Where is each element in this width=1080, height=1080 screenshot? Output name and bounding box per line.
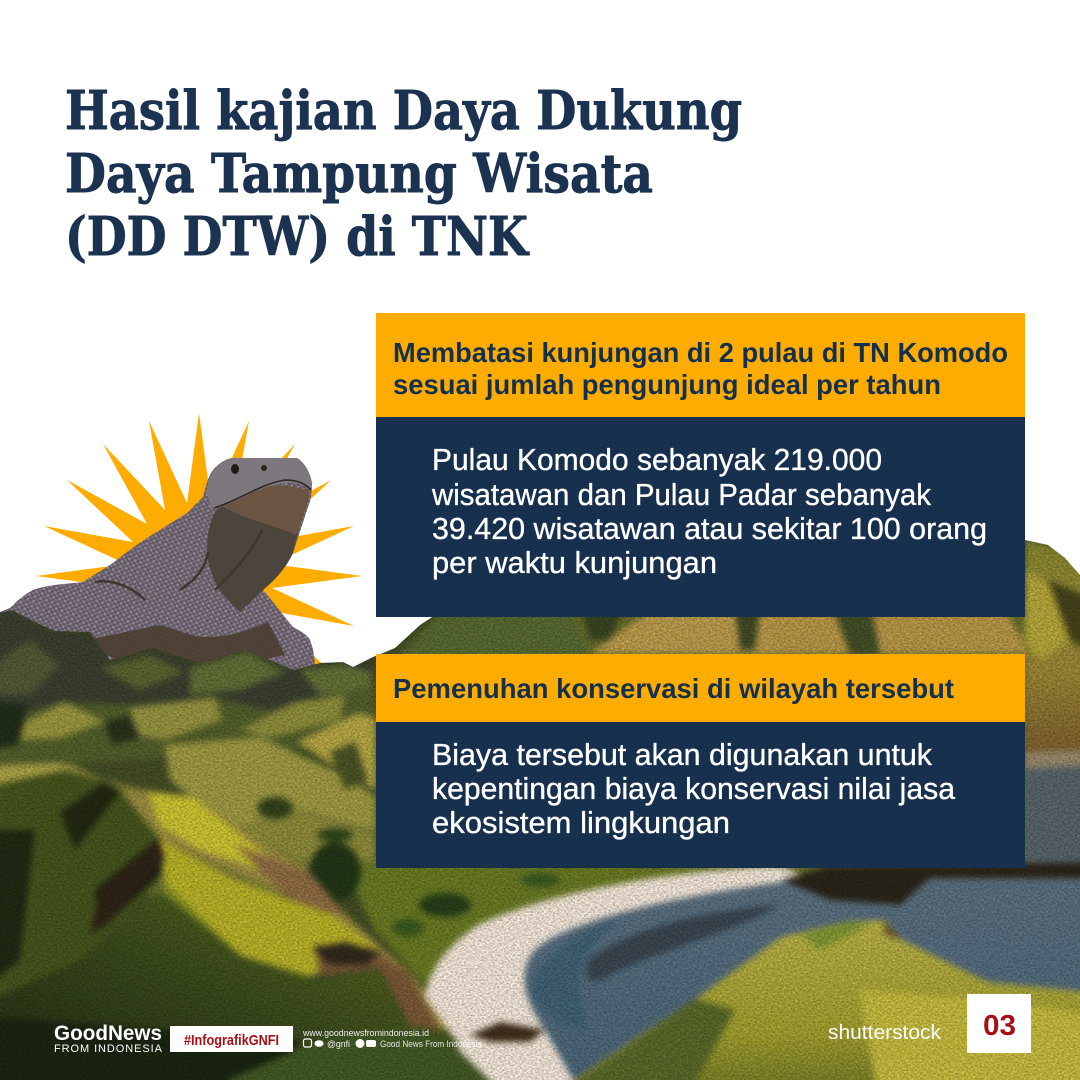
title: Daya Tampung Wisata: [65, 143, 653, 205]
panel body text: 39.420 wisatawan atau sekitar 100 orang: [432, 511, 987, 546]
panel body text: ekosistem lingkungan: [432, 805, 730, 840]
komodo body: [0, 458, 315, 690]
title: (DD DTW) di TNK: [65, 206, 530, 268]
panel body text: wisatawan dan Pulau Padar sebanyak: [431, 477, 931, 512]
footer: social links: [302, 1028, 483, 1050]
icon: twitter: [314, 1040, 324, 1047]
landscape photo: [0, 500, 1080, 1080]
main mountain lower shaded flank: [0, 888, 445, 1046]
panel: conservation: [376, 654, 1025, 868]
panel body box: [376, 417, 1025, 617]
bottom-right hill: [574, 920, 1080, 1080]
rock outcrop: [315, 945, 440, 1030]
panel body box: [376, 722, 1025, 868]
beach: [425, 866, 810, 1080]
dark trees: [309, 842, 361, 902]
dark bottom left: [0, 1015, 300, 1080]
komodo eye: [231, 464, 239, 474]
main mountain sunlit ridge: [120, 790, 462, 1032]
komodo jaw: [222, 485, 310, 535]
icon: facebook: [356, 1039, 364, 1048]
photo credit: shutterstock: [828, 1022, 942, 1044]
komodo neck fold: [95, 530, 262, 600]
panel heading bar: [376, 654, 1025, 722]
panel heading bar: [376, 313, 1025, 417]
page number badge: 03: [983, 1010, 1016, 1042]
panel heading text: Membatasi kunjungan di 2 pulau di TN Komodo: [393, 337, 1008, 368]
green meadow behind beach: [355, 858, 701, 986]
sun burst behind komodo: [36, 413, 362, 672]
base land: [0, 540, 1058, 1026]
panel body text: kepentingan biaya konservasi nilai jasa: [432, 771, 956, 806]
far left dark hills: [0, 612, 372, 708]
middle ridge sunlit: [590, 617, 782, 654]
bottom trail hill: [226, 1035, 496, 1080]
far hills strip behind panels: [402, 600, 1028, 876]
panel body text: per waktu kunjungan: [432, 545, 717, 580]
footer: social links: www.goodnewsfromindonesia.id: [302, 1028, 429, 1039]
footer: social links: Good News From Indonesia: [380, 1039, 483, 1050]
panel body text: Pulau Komodo sebanyak 219.000: [432, 442, 882, 477]
beach rocks: [470, 1022, 545, 1042]
icon: instagram: [304, 1039, 312, 1047]
komodo nostril: [261, 465, 267, 471]
title: Hasil kajian Daya Dukung: [65, 80, 742, 142]
water right bay: [500, 755, 1080, 1080]
logo wordmark: GoodNews: [54, 1022, 162, 1045]
panel heading text: sesuai jumlah pengunjung ideal per tahun: [393, 369, 941, 400]
panel body text: Biaya tersebut akan digunakan untuk: [432, 737, 932, 772]
komodo neck shading: [207, 492, 304, 612]
main left mountain shaded side: [0, 766, 162, 987]
dark bay shadow: [587, 905, 780, 981]
mid hills: [64, 761, 376, 898]
footer: logo: [54, 1022, 163, 1055]
footer: hashtag badge: [170, 1026, 293, 1052]
footer: hashtag badge: #InfografikGNFI: [184, 1032, 279, 1049]
logo subline: FROM INDONESIA: [54, 1043, 163, 1055]
icon: youtube: [366, 1040, 376, 1047]
komodo dragon: [0, 458, 315, 690]
panel heading text: Pemenuhan konservasi di wilayah tersebut: [393, 673, 954, 704]
footer: social links: @gnfi: [327, 1039, 350, 1050]
komodo belly shadow: [70, 622, 285, 672]
right mountain: [1025, 540, 1080, 760]
panel: visitor limit: [376, 313, 1025, 617]
rocky spit: [782, 862, 1080, 905]
page number badge: [967, 994, 1031, 1053]
band of green hills: [0, 686, 376, 770]
komodo head: [206, 458, 312, 508]
main mountain lit yellow slope: [159, 838, 379, 976]
komodo mouth line: [214, 480, 311, 508]
